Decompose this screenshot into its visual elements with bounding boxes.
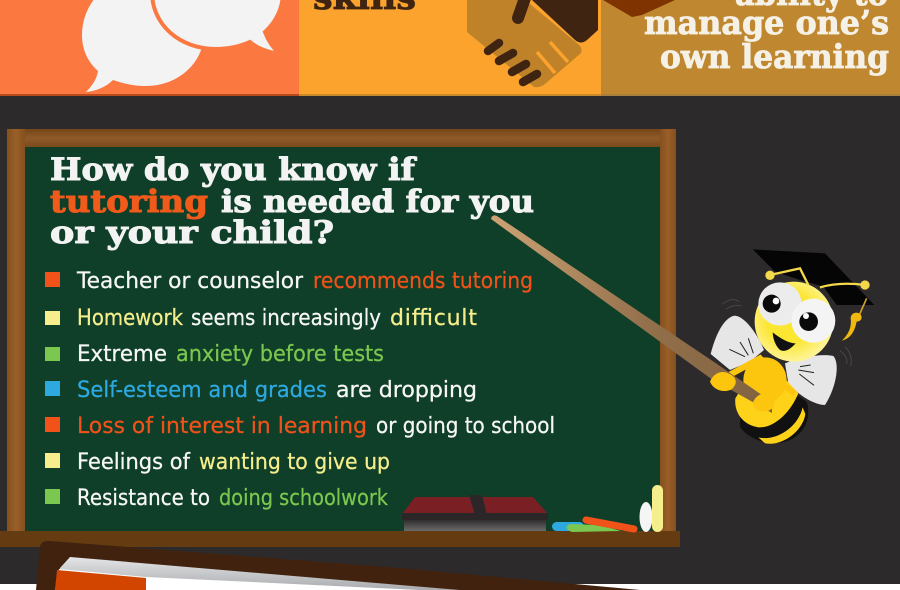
item 6: wanting to give up — [199, 450, 390, 475]
icon: dark pointed shape — [603, 0, 675, 17]
icon: handshake — [467, 0, 598, 87]
item 7: doing schoolwork — [219, 486, 388, 511]
wings — [711, 316, 764, 370]
item 1: Teacher or counselor — [76, 269, 304, 294]
heading: is needed for you — [221, 184, 534, 220]
top panel: ability to manage one's own learning — [601, 0, 900, 96]
eyes — [758, 282, 802, 326]
torso — [743, 357, 787, 403]
item 3: Extreme — [77, 342, 167, 367]
item 3: anxiety before tests — [176, 342, 384, 367]
checklist — [45, 269, 555, 511]
eraser — [402, 495, 548, 531]
item 5: or going to school — [376, 414, 555, 439]
item 2: seems increasingly — [191, 306, 381, 331]
item 5: Loss of interest in learning — [77, 414, 367, 439]
board frame — [7, 129, 676, 531]
text: manage one's: manage one’s — [644, 3, 889, 42]
top panel: communication — [0, 0, 299, 96]
head — [755, 282, 833, 362]
arm — [723, 358, 795, 393]
mortarboard — [753, 249, 874, 305]
item 1 — [45, 269, 533, 294]
tassel — [859, 298, 867, 315]
item 5 — [45, 414, 555, 439]
heading: How do you know if — [50, 152, 417, 188]
item 4: are dropping — [336, 378, 477, 403]
item 2: difficult — [390, 306, 477, 331]
heading: tutoring — [50, 184, 208, 220]
item 4: Self-esteem and grades — [77, 378, 327, 403]
item 3 — [45, 342, 384, 367]
pointer stick — [491, 215, 772, 413]
item 6 — [45, 450, 390, 475]
antennae — [770, 268, 865, 287]
top panel: skills — [299, 0, 601, 96]
item 6: Feelings of — [77, 450, 191, 475]
board surface — [25, 147, 660, 531]
item 4 — [45, 378, 477, 403]
chalk pieces — [552, 485, 663, 532]
icon: bee mascot body — [711, 249, 874, 444]
book at bottom — [0, 541, 900, 590]
item 7 — [45, 486, 388, 511]
item 1: recommends tutoring — [313, 269, 533, 294]
mouth — [773, 332, 796, 351]
item 7: Resistance to — [77, 486, 210, 511]
item 2: Homework — [77, 306, 183, 331]
icon: speech bubbles — [82, 0, 283, 92]
text: own learning: own learning — [660, 37, 889, 76]
ledge — [0, 531, 680, 547]
abdomen — [740, 390, 808, 443]
item 2 — [45, 306, 477, 331]
panel: chalkboard — [0, 129, 680, 547]
heading — [50, 152, 534, 251]
icon: bee hands — [710, 372, 775, 412]
heading: or your child? — [50, 215, 334, 251]
